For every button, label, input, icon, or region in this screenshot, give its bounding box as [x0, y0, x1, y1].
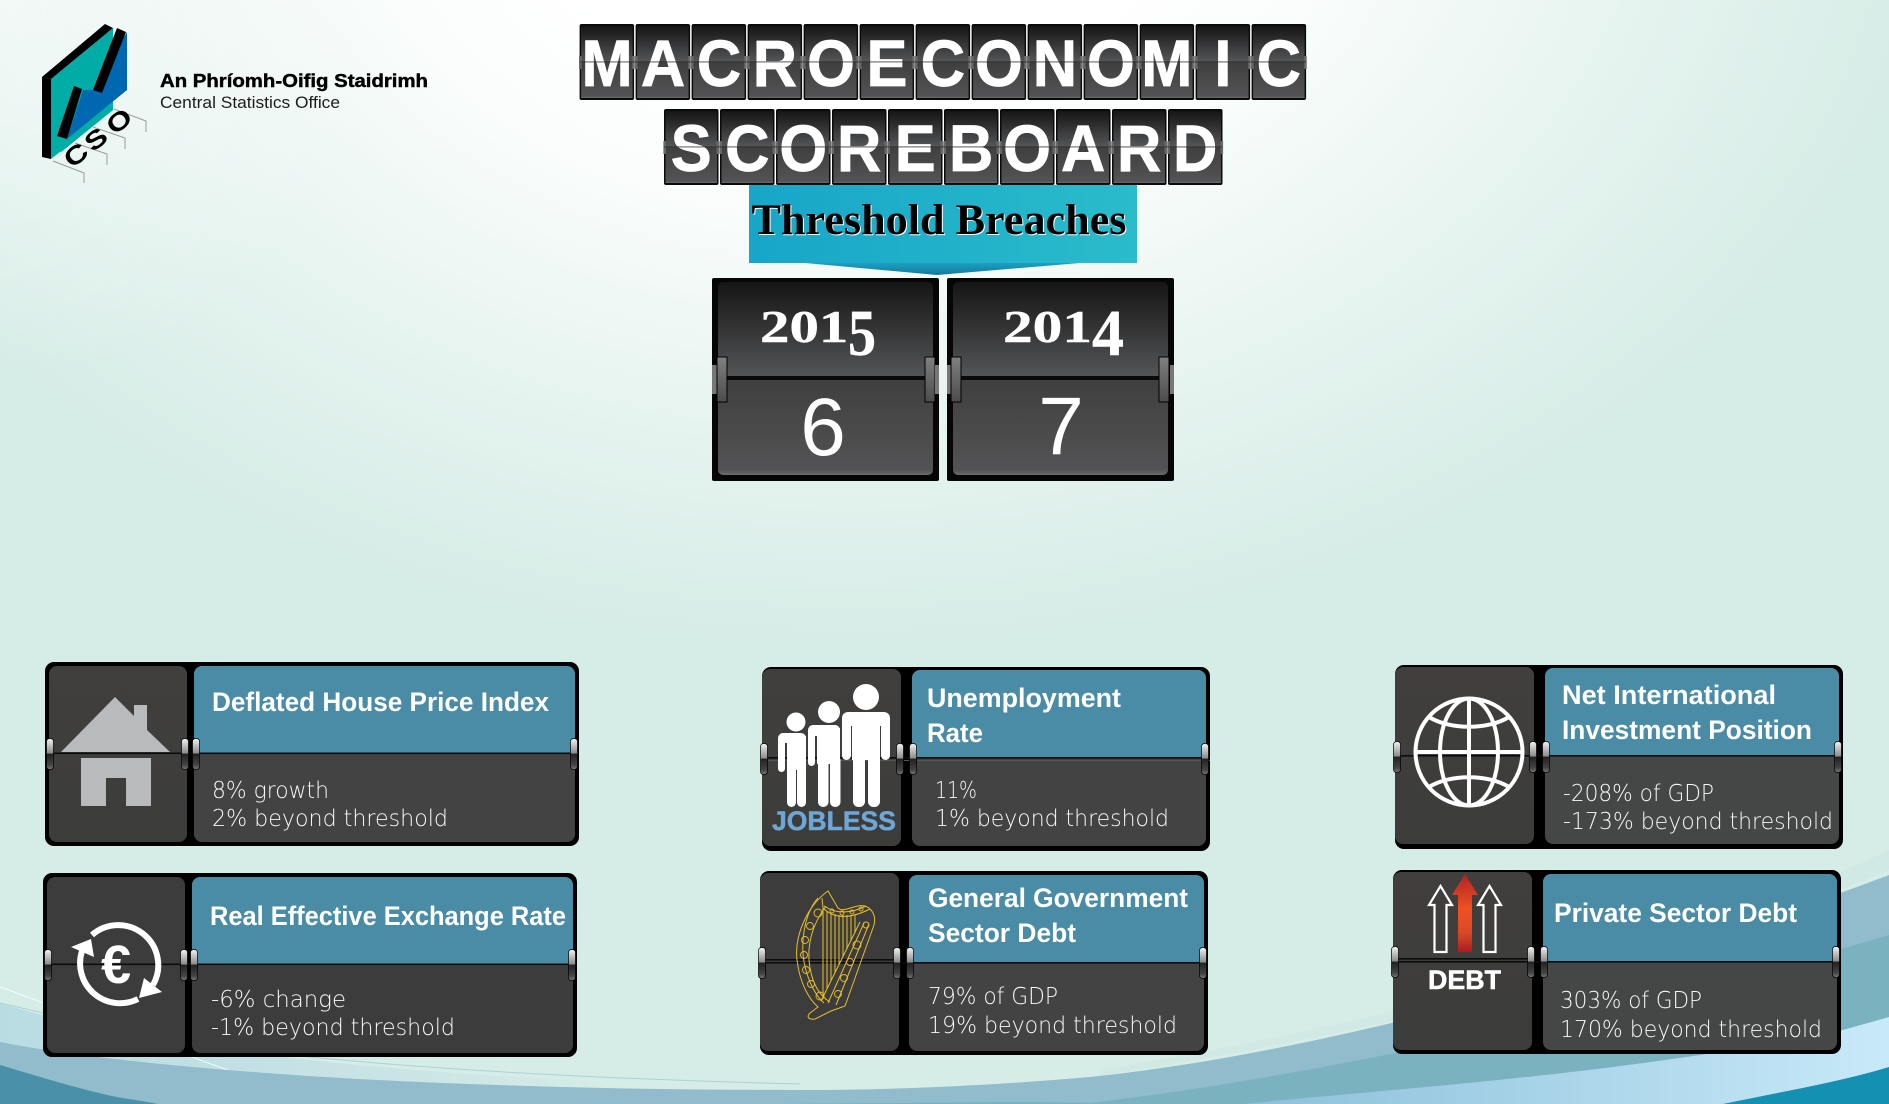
body text: 79% of GDP	[928, 982, 1058, 1010]
icon: CSO mark	[42, 24, 146, 183]
card: Private Sector Debt	[1392, 870, 1841, 1054]
card: Unemployment Rate: Rate	[927, 718, 983, 748]
icon: euro cycle: €	[101, 935, 131, 995]
icon: globe	[1416, 698, 1522, 806]
icon: debt arrows	[1428, 874, 1502, 995]
label: year 2015: 201	[760, 300, 848, 352]
card: Unemployment Rate	[760, 667, 1210, 851]
body text: 303% of GDP	[1560, 986, 1702, 1014]
heading: Deflated House Price Index	[212, 687, 549, 717]
heading: Unemployment	[927, 683, 1121, 713]
body text: -6% change	[211, 985, 346, 1013]
body text: 11%	[935, 776, 977, 804]
card: General Government Sector Debt: 19% beyond threshold	[928, 1011, 1177, 1039]
banner: Threshold Breaches	[749, 185, 1137, 275]
card: Deflated House Price Index	[45, 662, 579, 846]
card: Deflated House Price Index: 2% beyond threshold	[212, 804, 448, 832]
icon: jobless family	[772, 684, 896, 836]
icon: Irish harp	[797, 891, 875, 1019]
title: SCOREBOARD flip tiles: SCOREBOARD	[671, 111, 1217, 185]
logo Irish name: An Phríomh-Oifig Staidrimh	[160, 70, 428, 91]
card: Net International Investment Position: -173% beyond threshold	[1563, 807, 1833, 835]
label: year 2014: 4	[1092, 296, 1124, 370]
card: Net International Investment Position: Investment Position	[1562, 715, 1812, 745]
label: year 2014: 201	[1003, 300, 1092, 352]
icon: euro cycle	[71, 925, 162, 1003]
panel: 2014 breaches flip board	[947, 278, 1174, 481]
banner: Threshold Breaches: Threshold Breaches	[752, 198, 1128, 245]
title: MACROECONOMIC flip tiles: MACROECONOMIC	[581, 26, 1301, 100]
label: year 2014	[1003, 296, 1124, 370]
logo: Central Statistics Office	[42, 24, 428, 183]
value: 7: 7	[1038, 381, 1084, 472]
panel: 2015 breaches flip board	[712, 278, 939, 481]
logo English name: Central Statistics Office	[160, 93, 340, 112]
value: 6: 6	[800, 382, 846, 473]
icon: house	[61, 697, 170, 806]
heading: Private Sector Debt	[1554, 898, 1797, 928]
card: General Government Sector Debt	[758, 871, 1208, 1055]
body text: 8% growth	[212, 776, 329, 804]
heading: Net International	[1562, 680, 1776, 710]
card: Private Sector Debt: 170% beyond threshold	[1560, 1015, 1822, 1043]
body text: -208% of GDP	[1563, 779, 1714, 807]
card: Real Effective Exchange Rate: -1% beyond threshold	[211, 1013, 455, 1041]
banner: Threshold Breaches: Threshold Breaches	[752, 197, 1126, 244]
heading: Real Effective Exchange Rate	[210, 901, 566, 931]
card: Unemployment Rate: 1% beyond threshold	[935, 804, 1169, 832]
icon: jobless family: JOBLESS	[772, 806, 896, 836]
card: Net International Investment Position	[1394, 665, 1843, 849]
label: year 2015	[760, 296, 876, 370]
icon: CSO mark: CSO	[59, 103, 138, 174]
label: year 2015: 5	[848, 296, 876, 370]
card: General Government Sector Debt: Sector Debt	[928, 918, 1076, 948]
icon: debt arrows: DEBT	[1428, 965, 1502, 995]
card: Real Effective Exchange Rate	[43, 873, 577, 1057]
heading: General Government	[928, 883, 1188, 913]
